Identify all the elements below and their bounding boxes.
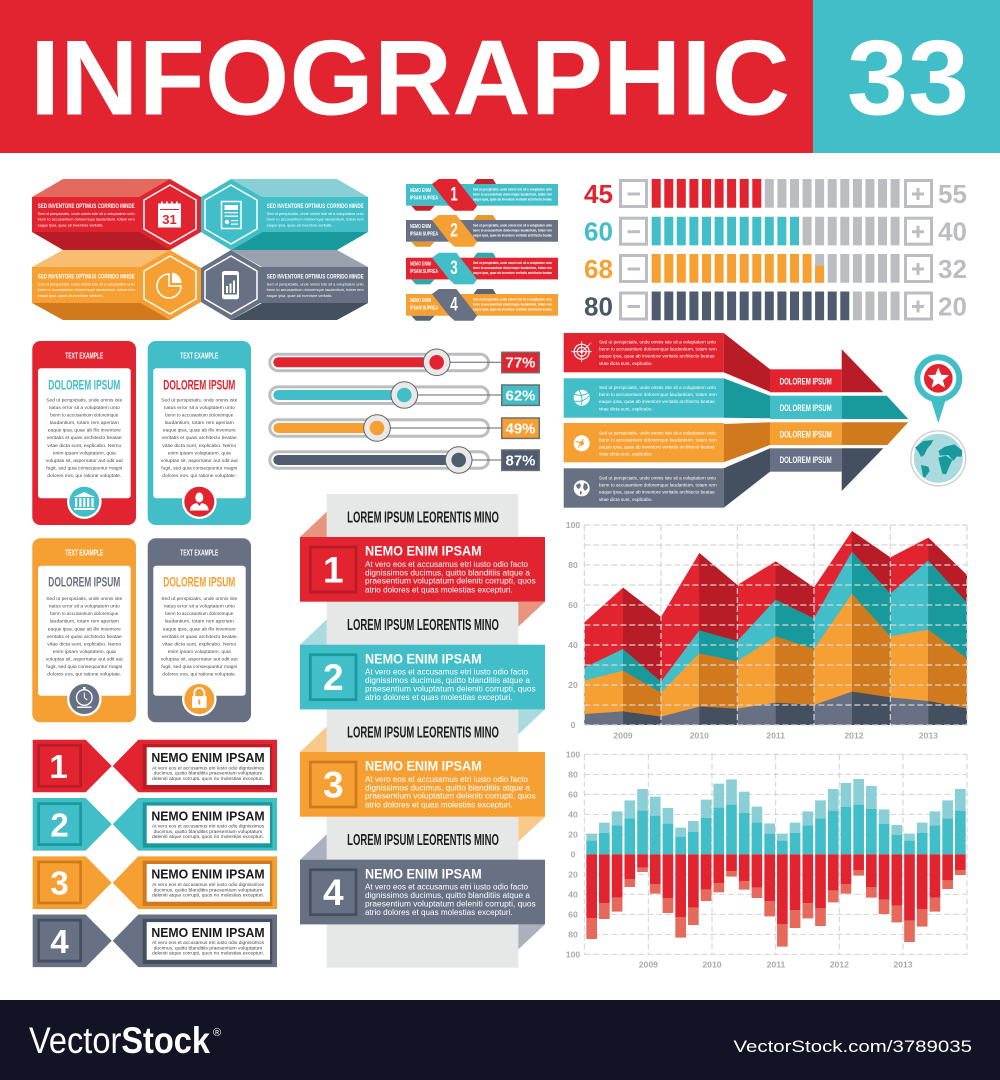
card: orange: eaque ipsa, quae ab illo inventore <box>48 626 121 631</box>
hourglass item 1 <box>33 740 277 792</box>
hourglass item 4: NEMO ENIM IPSAM <box>151 926 265 940</box>
icon: disc <box>574 435 590 451</box>
arrow band: red: DOLOREM IPSUM <box>780 376 832 388</box>
progress row 80 / 20: 20 <box>938 292 967 322</box>
title number: 33 <box>847 18 969 138</box>
hourglass item 3: deleniti atque corrupti, quos rio molestias excepturi. <box>152 893 264 898</box>
bar chart y axis: 40 <box>568 889 578 899</box>
ribbon item 1: At vero eos et accusamus etri iusto odio facto <box>365 560 529 569</box>
hourglass item 2: NEMO ENIM IPSAM <box>151 809 265 823</box>
slider 87% <box>270 447 539 473</box>
hourglass item 4: deleniti atque corrupti, quos rio molestias excepturi. <box>152 951 264 956</box>
card: slate: Sed ut perspiciatis, unde omnis iste <box>161 596 238 601</box>
progress row 68 / 32: 32 <box>938 254 967 284</box>
icon: bank <box>67 484 102 519</box>
card: red: veritatis et quasi architecto beatae <box>47 435 122 440</box>
ribbon 3: benn to accusantium doloremque laudantium, totam rem <box>473 266 552 270</box>
arrow band: teal: vitae dicta sunt, explicabo. <box>599 407 653 412</box>
ribbon item 1: 1 <box>323 550 344 590</box>
card: red: laudantium, totam rem aperiam <box>50 420 119 425</box>
icon: padlock <box>182 682 217 716</box>
icon: calendar: 31 <box>162 212 177 227</box>
card: teal: voluptas sit, aspernatur aut odit aut <box>161 458 239 463</box>
hexagon block: red: eaque ipsa, quae ab inventore veritatis. <box>38 224 103 228</box>
arrow band: orange: DOLOREM IPSUM <box>780 430 832 440</box>
bar chart y axis <box>566 749 580 959</box>
hourglass item 3: ducimus, quitto blanditiis praesentium voluptatum <box>154 887 263 892</box>
bar chart x axis: 2010 <box>702 959 722 969</box>
ribbon item 1 <box>300 510 545 627</box>
arrow band: teal: DOLOREM IPSUM <box>780 403 832 414</box>
hexagon block: orange: Sed ut perspiciatis, unde omnis iste sit a voluptatem unto <box>38 282 135 286</box>
hexagon block: orange: eaque ipsa, quae ab inventore veritatis. <box>38 294 103 298</box>
bar chart grid <box>584 754 967 954</box>
card: red: Sed ut perspiciatis, unde omnis iste <box>46 397 123 402</box>
arrow band: red: vitae dicta sunt, explicabo. <box>599 361 653 366</box>
card: teal: Sed ut perspiciatis, unde omnis iste <box>161 397 238 402</box>
arrow band: orange: vitae dicta sunt, explicabo. <box>599 452 653 457</box>
area chart x axis: 2010 <box>690 730 709 740</box>
ribbon item 4: dignissimos ducimus, quitto blanditiis atque a <box>365 891 531 900</box>
card: slate: vitae dicta sunt, explicabo. Nemo <box>162 641 237 646</box>
card: teal: dolores eos, qui ratione voluptate. <box>162 473 236 478</box>
ribbon item 3: atrio dolores et quas molestias excepturi. <box>365 800 513 809</box>
card: teal: fugit, sed quia consequuntur magni <box>161 466 237 470</box>
arrow band: red <box>564 333 883 392</box>
bar chart y axis: 100 <box>566 749 580 759</box>
hourglass item 4: ducimus, quitto blanditiis praesentium voluptatum <box>154 945 263 950</box>
ribbon 3 <box>406 253 558 284</box>
area chart y axis: 100 <box>566 520 580 530</box>
hexagon block: red <box>32 179 201 250</box>
arrow band: slate: Sed ut perspiciatis, unde omnis iste sit a voluptatem unto <box>599 475 717 480</box>
panel: twisted ribbons <box>406 179 558 321</box>
icon: target <box>571 341 592 362</box>
area chart y axis <box>566 520 580 730</box>
ribbon item 2: LOREM IPSUM LEORENTIS MINO <box>347 617 499 634</box>
card: slate <box>148 538 251 722</box>
card: slate: dolores eos, qui ratione voluptate. <box>162 672 236 677</box>
card: orange: laudantium, totam rem aperiam <box>50 619 119 624</box>
card: slate: fugit, sed quia consequuntur magni <box>161 664 237 669</box>
ribbon 2: benn to accusantium doloremque laudantium, totam rem <box>473 228 552 232</box>
area chart y axis: 20 <box>568 680 578 690</box>
ribbon item 3 <box>300 724 545 842</box>
area chart x axis: 2009 <box>613 730 633 740</box>
ribbon 3: NEMO ENIM <box>410 262 431 268</box>
ribbon item 3: 3 <box>323 764 344 806</box>
ribbon item 4: At vero eos et accusamus etri iusto odio facto <box>365 883 529 892</box>
slider 49% <box>270 415 539 441</box>
bar chart y axis: 60 <box>568 909 578 919</box>
ribbon item 2: 2 <box>323 657 344 698</box>
area chart <box>566 520 967 740</box>
hexagon block: teal: eaque ipsa, quae ab inventore veritatis. <box>267 224 332 228</box>
card: red: vitae dicta sunt, explicabo. Nemo <box>47 443 122 448</box>
slider 62% <box>270 382 539 408</box>
ribbon 4: IPSAM SUPREA <box>410 306 438 312</box>
hourglass item 3: At vero eos et accusamus etri iusto odio dignissimos <box>152 882 265 887</box>
area chart x axis <box>613 730 938 740</box>
hexagon block: slate: benn to accusantium doloremque laudantium, totam rem <box>267 288 364 292</box>
card: orange: DOLOREM IPSUM <box>48 574 120 590</box>
card: red: dolores eos, qui ratione voluptate. <box>47 473 121 478</box>
positive bars: light tops <box>586 779 966 841</box>
hexagon block: orange: SED INVENTORE OPTIMUS CORRIDO MINDE <box>38 273 135 280</box>
card: red <box>32 341 136 525</box>
ribbon 1: IPSAM SUPREA <box>410 196 438 202</box>
arrow band: red: Sed ut perspiciatis, unde omnis iste sit a voluptatem unto <box>599 339 717 344</box>
ribbon item 1: dignissimos ducimus, quitto blanditiis atque a <box>365 568 531 577</box>
ribbon 4 <box>406 289 558 321</box>
card: red: benn to accusantium doloremque <box>50 412 119 418</box>
icon: document <box>222 202 241 228</box>
hourglass item 2 <box>33 798 277 851</box>
ribbon 4: 4 <box>450 294 458 316</box>
card: teal: vitae dicta sunt, explicabo. Nemo <box>162 443 237 448</box>
ribbon 3: IPSAM SUPREA <box>410 269 438 275</box>
card: orange: veritatis et quasi architecto beatae <box>47 634 122 639</box>
panel: center ribbon list <box>300 494 545 968</box>
progress row 45 / 55 <box>584 179 967 209</box>
panel: hourglass numbered list <box>33 740 277 967</box>
area chart x axis: 2012 <box>844 730 864 740</box>
bar chart x axis: 2011 <box>767 959 786 969</box>
ribbon item 4: atrio dolores et quas molestias excepturi. <box>365 908 513 917</box>
hexagon block: slate: SED INVENTORE OPTIMUS CORRIDO MINDE <box>267 273 364 280</box>
area chart y axis: 60 <box>568 600 578 610</box>
hexagon block: red: Sed ut perspiciatis, unde omnis iste sit a voluptatem unto <box>38 212 135 216</box>
area chart y axis: 0 <box>571 720 576 730</box>
ribbon 1: 1 <box>450 184 458 206</box>
negative bars: light ends <box>586 868 966 947</box>
card: red: DOLOREM IPSUM <box>48 376 120 392</box>
hexagon block: slate <box>201 250 368 320</box>
card: slate: TEXT EXAMPLE <box>180 549 219 558</box>
card: orange: fugit, sed quia consequuntur magni <box>46 664 122 669</box>
panel: hexagon blocks <box>32 179 368 320</box>
card: teal: veritatis et quasi architecto beatae <box>162 435 237 440</box>
panel: text cards <box>32 341 251 722</box>
ribbon 1: NEMO ENIM <box>410 188 431 194</box>
ribbon 4: eaque ipsa, quae ab inventore veritatis architecto beatae <box>473 308 552 312</box>
slider 77% <box>270 349 539 376</box>
arrow band: slate: eaque ipsa, quae ab inventore veritatis architecto beatae <box>599 489 715 494</box>
card: orange: vitae dicta sunt, explicabo. Nemo <box>47 641 122 646</box>
ribbon item 3: LOREM IPSUM LEORENTIS MINO <box>347 724 499 742</box>
bar chart <box>566 749 967 969</box>
hexagon block: red: benn to accusantium doloremque laudantium, totam rem <box>38 218 135 222</box>
card: teal: benn to accusantium doloremque <box>165 412 234 418</box>
card: teal: DOLOREM IPSUM <box>163 376 235 392</box>
progress row 45 / 55: 45 <box>584 179 613 209</box>
hourglass item 2: ducimus, quitto blanditiis praesentium voluptatum <box>154 829 263 834</box>
arrow band: slate: benn to accusantium doloremque laudantium, totam rem <box>599 482 717 487</box>
ribbon item 3: dignissimos ducimus, quitto blanditiis atque a <box>365 783 531 792</box>
arrow band: teal: Sed ut perspiciatis, unde omnis iste sit a voluptatem unto <box>599 385 717 390</box>
card: teal: TEXT EXAMPLE <box>180 351 219 360</box>
bar chart y axis: 40 <box>568 809 578 819</box>
card: red: natus error sit a voluptatem unto <box>49 405 120 410</box>
hexagon block: red: SED INVENTORE OPTIMUS CORRIDO MINDE <box>38 203 135 210</box>
bar chart x axis: 2012 <box>830 959 849 969</box>
ribbon 4: NEMO ENIM <box>410 298 431 304</box>
arrow band: slate: DOLOREM IPSUM <box>780 455 832 466</box>
icon: basketball globe <box>574 390 590 406</box>
card: teal: eaque ipsa, quae ab illo inventore <box>163 428 236 433</box>
arrow band: red: benn to accusantium doloremque laudantium, totam rem <box>599 346 717 351</box>
ribbon 4: Sed ut perspiciatis, unde omnis iste sit a voluptatem unto <box>473 298 552 302</box>
hexagon block: teal: benn to accusantium doloremque laudantium, totam rem <box>267 218 364 222</box>
footer bar <box>0 1000 1000 1080</box>
footer url: VectorStock.com/3789035 <box>734 1037 972 1056</box>
ribbon item 4: NEMO ENIM IPSAM <box>365 866 482 881</box>
ribbon 4: benn to accusantium doloremque laudantium, totam rem <box>473 302 552 306</box>
hexagon block: teal: SED INVENTORE OPTIMUS CORRIDO MINDE <box>267 203 364 210</box>
hexagon block: orange <box>32 250 201 320</box>
icon: calendar <box>158 202 181 228</box>
ribbon item 1: LOREM IPSUM LEORENTIS MINO <box>347 510 499 526</box>
hourglass item 1: At vero eos et accusamus etri iusto odio dignissimos <box>152 765 265 770</box>
icon: person <box>182 484 217 519</box>
bar chart x axis <box>639 959 913 969</box>
hourglass item 3: 3 <box>50 865 69 902</box>
card: orange: dolores eos, qui ratione voluptate. <box>47 672 121 677</box>
arrow band: red: eaque ipsa, quae ab inventore veritatis architecto beatae <box>599 353 715 358</box>
ribbon 1: Sed ut perspiciatis, unde omnis iste sit a voluptatem unto <box>473 188 552 192</box>
hexagon block: slate: eaque ipsa, quae ab inventore veritatis. <box>267 294 332 298</box>
ribbon 2: IPSAM SUPREA <box>410 232 438 238</box>
ribbon 1 <box>406 179 558 211</box>
hourglass item 2: deleniti atque corrupti, quos rio molestias excepturi. <box>152 834 264 839</box>
hourglass item 3 <box>33 856 277 909</box>
icon: smartphone <box>222 271 239 299</box>
hourglass item 3: NEMO ENIM IPSAM <box>151 868 265 882</box>
ribbon 3: Sed ut perspiciatis, unde omnis iste sit a voluptatem unto <box>473 261 552 265</box>
slider 77%: 77% <box>505 355 536 372</box>
hourglass item 4: 4 <box>50 923 69 960</box>
card: teal: enim ipsam voluptatem, quia <box>168 450 231 455</box>
header banner <box>0 0 1000 153</box>
card: slate: veritatis et quasi architecto beatae <box>162 634 237 639</box>
arrow band: orange: benn to accusantium doloremque laudantium, totam rem <box>599 437 717 442</box>
progress row 45 / 55: 55 <box>938 179 967 209</box>
card: slate: voluptas sit, aspernatur aut odit aut <box>161 657 239 662</box>
bar chart y axis: 20 <box>568 869 578 879</box>
area chart x axis: 2013 <box>919 730 938 740</box>
ribbon item 2: praesentium voluptatum deleniti corrupti, quos <box>365 684 536 693</box>
hourglass item 1: NEMO ENIM IPSAM <box>151 751 265 765</box>
ribbon item 2: dignissimos ducimus, quitto blanditiis atque a <box>365 676 531 685</box>
bar chart y axis: 20 <box>568 829 578 839</box>
card: orange: enim ipsam voluptatem, quia <box>53 649 116 654</box>
card: orange <box>32 538 136 722</box>
hourglass item 1: 1 <box>49 748 68 785</box>
ribbon item 3: At vero eos et accusamus etri iusto odio facto <box>365 775 529 784</box>
area chart x axis: 2011 <box>766 730 785 740</box>
slider 49%: 49% <box>505 420 536 437</box>
ribbon 3: 3 <box>450 258 458 279</box>
ribbon item 1: NEMO ENIM IPSAM <box>365 544 482 559</box>
arrow band: slate <box>564 448 883 508</box>
arrow band: teal: eaque ipsa, quae ab inventore veritatis architecto beatae <box>599 399 715 404</box>
card: slate: eaque ipsa, quae ab illo inventore <box>163 626 236 631</box>
ribbon item 4: praesentium voluptatum deleniti corrupti, quos <box>365 899 536 908</box>
positive bars: solid <box>586 805 966 854</box>
card: slate: laudantium, totam rem aperiam <box>165 619 234 624</box>
title: INFOGRAPHIC <box>30 18 790 138</box>
icon: stopwatch <box>67 682 102 716</box>
hourglass item 2: 2 <box>50 806 69 843</box>
card: orange: Sed ut perspiciatis, unde omnis iste <box>46 596 123 601</box>
area chart y axis: 40 <box>568 640 578 650</box>
ribbon item 3: praesentium voluptatum deleniti corrupti, quos <box>365 792 536 801</box>
arrow band: orange: eaque ipsa, quae ab inventore veritatis architecto beatae <box>599 444 715 449</box>
ribbon item 1: praesentium voluptatum deleniti corrupti, quos <box>365 577 536 586</box>
ribbon item 1: atrio dolores et quas molestias excepturi. <box>365 585 513 594</box>
icon: world <box>574 480 590 496</box>
card: red: fugit, sed quia consequuntur magni <box>46 466 122 470</box>
progress row 80 / 20: 80 <box>584 292 613 322</box>
ribbon item 2 <box>300 617 545 734</box>
card: orange: benn to accusantium doloremque <box>50 611 119 616</box>
hourglass item 4: At vero eos et accusamus etri iusto odio dignissimos <box>152 940 265 945</box>
progress row 60 / 40: 60 <box>584 217 613 247</box>
arrow band: slate: vitae dicta sunt, explicabo. <box>599 497 653 502</box>
ribbon 1: benn to accusantium doloremque laudantium, totam rem <box>473 192 552 196</box>
hourglass item 4 <box>33 914 277 967</box>
bar chart y axis: 60 <box>568 789 578 799</box>
panel: merging arrow <box>564 333 966 508</box>
ribbon 1: eaque ipsa, quae ab inventore veritatis architecto beatae <box>473 198 552 202</box>
card: orange: voluptas sit, aspernatur aut odit aut <box>46 657 124 662</box>
card: red: eaque ipsa, quae ab illo inventore <box>48 428 121 433</box>
ribbon 2 <box>406 215 558 247</box>
area layers: light <box>584 531 967 725</box>
negative bars: solid <box>586 854 966 924</box>
card: teal: laudantium, totam rem aperiam <box>165 420 234 425</box>
hourglass item 2: At vero eos et accusamus etri iusto odio dignissimos <box>152 824 265 829</box>
arrow band: teal: benn to accusantium doloremque laudantium, totam rem <box>599 392 717 397</box>
bar chart y axis: 100 <box>566 949 580 959</box>
progress row 60 / 40 <box>584 217 967 247</box>
hexagon block: teal: Sed ut perspiciatis, unde omnis iste sit a voluptatem unto <box>267 212 364 216</box>
area chart grid <box>584 525 967 725</box>
panel: sliders <box>270 349 539 473</box>
ribbon 2: eaque ipsa, quae ab inventore veritatis architecto beatae <box>473 234 552 238</box>
slider 62%: 62% <box>505 387 536 404</box>
arrow band: orange <box>564 422 908 462</box>
ribbon item 4: 4 <box>323 872 344 913</box>
registered mark: ® <box>213 1027 221 1039</box>
ribbon 2: Sed ut perspiciatis, unde omnis iste sit a voluptatem unto <box>473 224 552 228</box>
ribbon item 4: LOREM IPSUM LEORENTIS MINO <box>347 832 499 849</box>
ribbon item 2: atrio dolores et quas molestias excepturi. <box>365 693 513 702</box>
card: red: voluptas sit, aspernatur aut odit aut <box>46 458 124 463</box>
bar chart x axis: 2009 <box>639 959 658 969</box>
ribbon 2: 2 <box>450 220 458 242</box>
bar chart x axis: 2013 <box>893 959 913 969</box>
progress row 80 / 20 <box>584 292 967 322</box>
card: teal: natus error sit a voluptatem unto <box>164 405 235 410</box>
ribbon item 3: NEMO ENIM IPSAM <box>365 759 482 774</box>
bar chart y axis: 80 <box>568 929 578 939</box>
card: teal <box>148 341 251 525</box>
hexagon block: teal <box>201 179 368 250</box>
icon: location pin with star <box>914 354 962 423</box>
hexagon block: slate: Sed ut perspiciatis, unde omnis iste sit a voluptatem unto <box>267 282 364 286</box>
card: slate: DOLOREM IPSUM <box>163 574 235 590</box>
ribbon item 4 <box>300 832 545 949</box>
ribbon 3: eaque ipsa, quae ab inventore veritatis architecto beatae <box>473 271 552 275</box>
card: orange: natus error sit a voluptatem unto <box>49 604 120 609</box>
card: slate: enim ipsam voluptatem, quia <box>168 649 231 654</box>
area chart y axis: 80 <box>568 560 578 570</box>
icon: globe <box>911 431 966 486</box>
ribbon item 2: At vero eos et accusamus etri iusto odio facto <box>365 668 529 677</box>
progress row 68 / 32 <box>584 254 967 284</box>
panel: segmented progress bars <box>584 179 967 322</box>
bar chart y axis: 80 <box>568 769 578 779</box>
arrow band: teal <box>564 378 908 419</box>
card: red: enim ipsam voluptatem, quia <box>53 450 116 455</box>
progress row 68 / 32: 68 <box>584 254 613 284</box>
bar chart y axis: 0 <box>571 849 576 859</box>
card: red: TEXT EXAMPLE <box>65 351 104 360</box>
progress row 60 / 40: 40 <box>938 217 967 247</box>
card: orange: TEXT EXAMPLE <box>65 549 104 558</box>
icon: pie chart <box>157 272 182 298</box>
card: slate: natus error sit a voluptatem unto <box>164 604 235 609</box>
arrow band: orange: Sed ut perspiciatis, unde omnis iste sit a voluptatem unto <box>599 430 717 435</box>
ribbon item 2: NEMO ENIM IPSAM <box>365 651 482 666</box>
footer logo: VectorStock <box>29 1020 210 1061</box>
hourglass item 1: deleniti atque corrupti, quos rio molestias excepturi. <box>152 776 264 781</box>
hexagon block: orange: benn to accusantium doloremque laudantium, totam rem <box>38 288 135 292</box>
ribbon 2: NEMO ENIM <box>410 224 431 230</box>
card: slate: benn to accusantium doloremque <box>165 611 234 616</box>
hourglass item 1: ducimus, quitto blanditiis praesentium voluptatum <box>154 771 263 776</box>
area layers: shaded columns <box>623 531 967 725</box>
slider 87%: 87% <box>505 452 536 469</box>
